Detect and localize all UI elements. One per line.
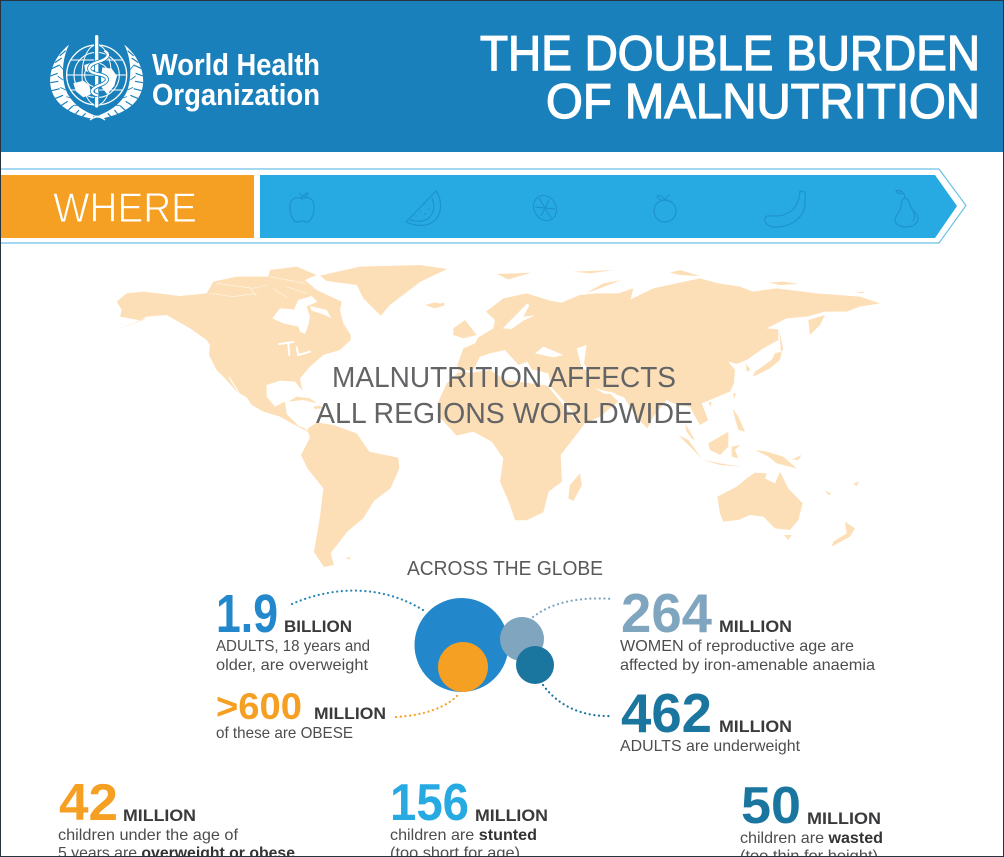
Asia islands — [753, 352, 782, 377]
icon: banana — [765, 191, 805, 227]
stat: 462 million underweight adults — [620, 682, 801, 755]
Eurasia inland seas — [535, 347, 563, 357]
stat: 156 million children stunted: children are stunted — [390, 827, 537, 844]
icon: apple — [290, 193, 314, 222]
map: South America and Greenland — [288, 265, 447, 567]
stat: 1.9 billion overweight adults: ADULTS, 18 years and — [216, 638, 370, 655]
stat: 42 million children overweight: 42 — [59, 774, 118, 832]
stat: 264 million women anaemia: MILLION — [719, 617, 792, 636]
map: North America — [113, 267, 351, 434]
stat: over 600 million obese: >600 — [216, 686, 302, 727]
header band — [0, 0, 1004, 152]
stat: 42 million children overweight — [58, 774, 295, 857]
world map — [113, 265, 880, 567]
map headline: ALL REGIONS WORLDWIDE — [316, 398, 693, 430]
icon: citrus slice — [529, 191, 561, 225]
icon: pear — [895, 190, 918, 227]
map headline — [316, 362, 693, 430]
stat: 264 million women anaemia: affected by iron-amenable anaemia — [620, 657, 875, 674]
stat: 1.9 billion overweight adults: BILLION — [284, 617, 352, 636]
icon: orange — [654, 195, 676, 222]
dotted connector: underweight — [543, 685, 613, 716]
stat: 264 million women anaemia — [620, 582, 875, 674]
map headline: MALNUTRITION AFFECTS — [332, 362, 676, 394]
stat: 1.9 billion overweight adults: 1.9 — [216, 584, 278, 644]
map: Africa and Madagascar — [438, 370, 584, 520]
dotted connector: obese — [396, 695, 458, 717]
WHO logo — [50, 37, 320, 120]
map: South-East Asia and Oceania — [678, 408, 859, 547]
North America inland water — [272, 296, 317, 334]
title — [480, 27, 980, 129]
icon: laurel wreath — [50, 45, 143, 120]
dotted connector: overweight — [292, 591, 426, 612]
stat: 50 million children wasted: MILLION — [807, 809, 881, 828]
orange label: WHERE: WHERE — [53, 184, 197, 231]
stat: over 600 million obese: of these are OBESE — [216, 725, 353, 742]
stat: 462 million underweight adults: ADULTS are underweight — [620, 738, 801, 755]
banner outline — [0, 169, 966, 243]
logo wordmark: Organization — [152, 77, 320, 112]
stat: 462 million underweight adults: 462 — [621, 682, 712, 744]
stat: 1.9 billion overweight adults — [216, 584, 370, 674]
stat: 264 million women anaemia: WOMEN of reproductive age are — [620, 638, 854, 655]
stat: 1.9 billion overweight adults: older, are overweight — [216, 657, 369, 674]
orange label: WHERE — [0, 175, 254, 238]
stat: 50 million children wasted: 50 — [741, 777, 801, 835]
stat: 156 million children stunted — [390, 774, 548, 857]
title: THE DOUBLE BURDEN — [480, 27, 980, 81]
stat: 42 million children overweight: MILLION — [123, 806, 196, 825]
stat: over 600 million obese: MILLION — [314, 704, 386, 723]
stat: 156 million children stunted: MILLION — [475, 806, 548, 825]
title: OF MALNUTRITION — [546, 75, 980, 129]
stat: 42 million children overweight: children under the age of — [58, 827, 239, 844]
stat: 50 million children wasted: children are wasted — [740, 830, 883, 847]
stat: over 600 million obese — [216, 686, 386, 742]
stat: 462 million underweight adults: MILLION — [719, 717, 792, 736]
blue arrow band — [260, 175, 957, 238]
icon: UN globe and staff emblem — [67, 37, 127, 106]
stat: 264 million women anaemia: 264 — [621, 582, 712, 644]
bubble diagram — [414, 598, 554, 692]
logo wordmark: World Health — [152, 47, 320, 82]
dotted connector: anaemia — [533, 598, 613, 617]
subheading: across the globe: ACROSS THE GLOBE — [407, 558, 603, 580]
icon: watermelon — [406, 191, 441, 225]
logo wordmark — [152, 47, 320, 112]
stat: 50 million children wasted — [740, 777, 883, 857]
section banner — [0, 169, 966, 243]
map: Eurasia — [440, 270, 880, 428]
stat: 156 million children stunted: 156 — [390, 774, 469, 832]
